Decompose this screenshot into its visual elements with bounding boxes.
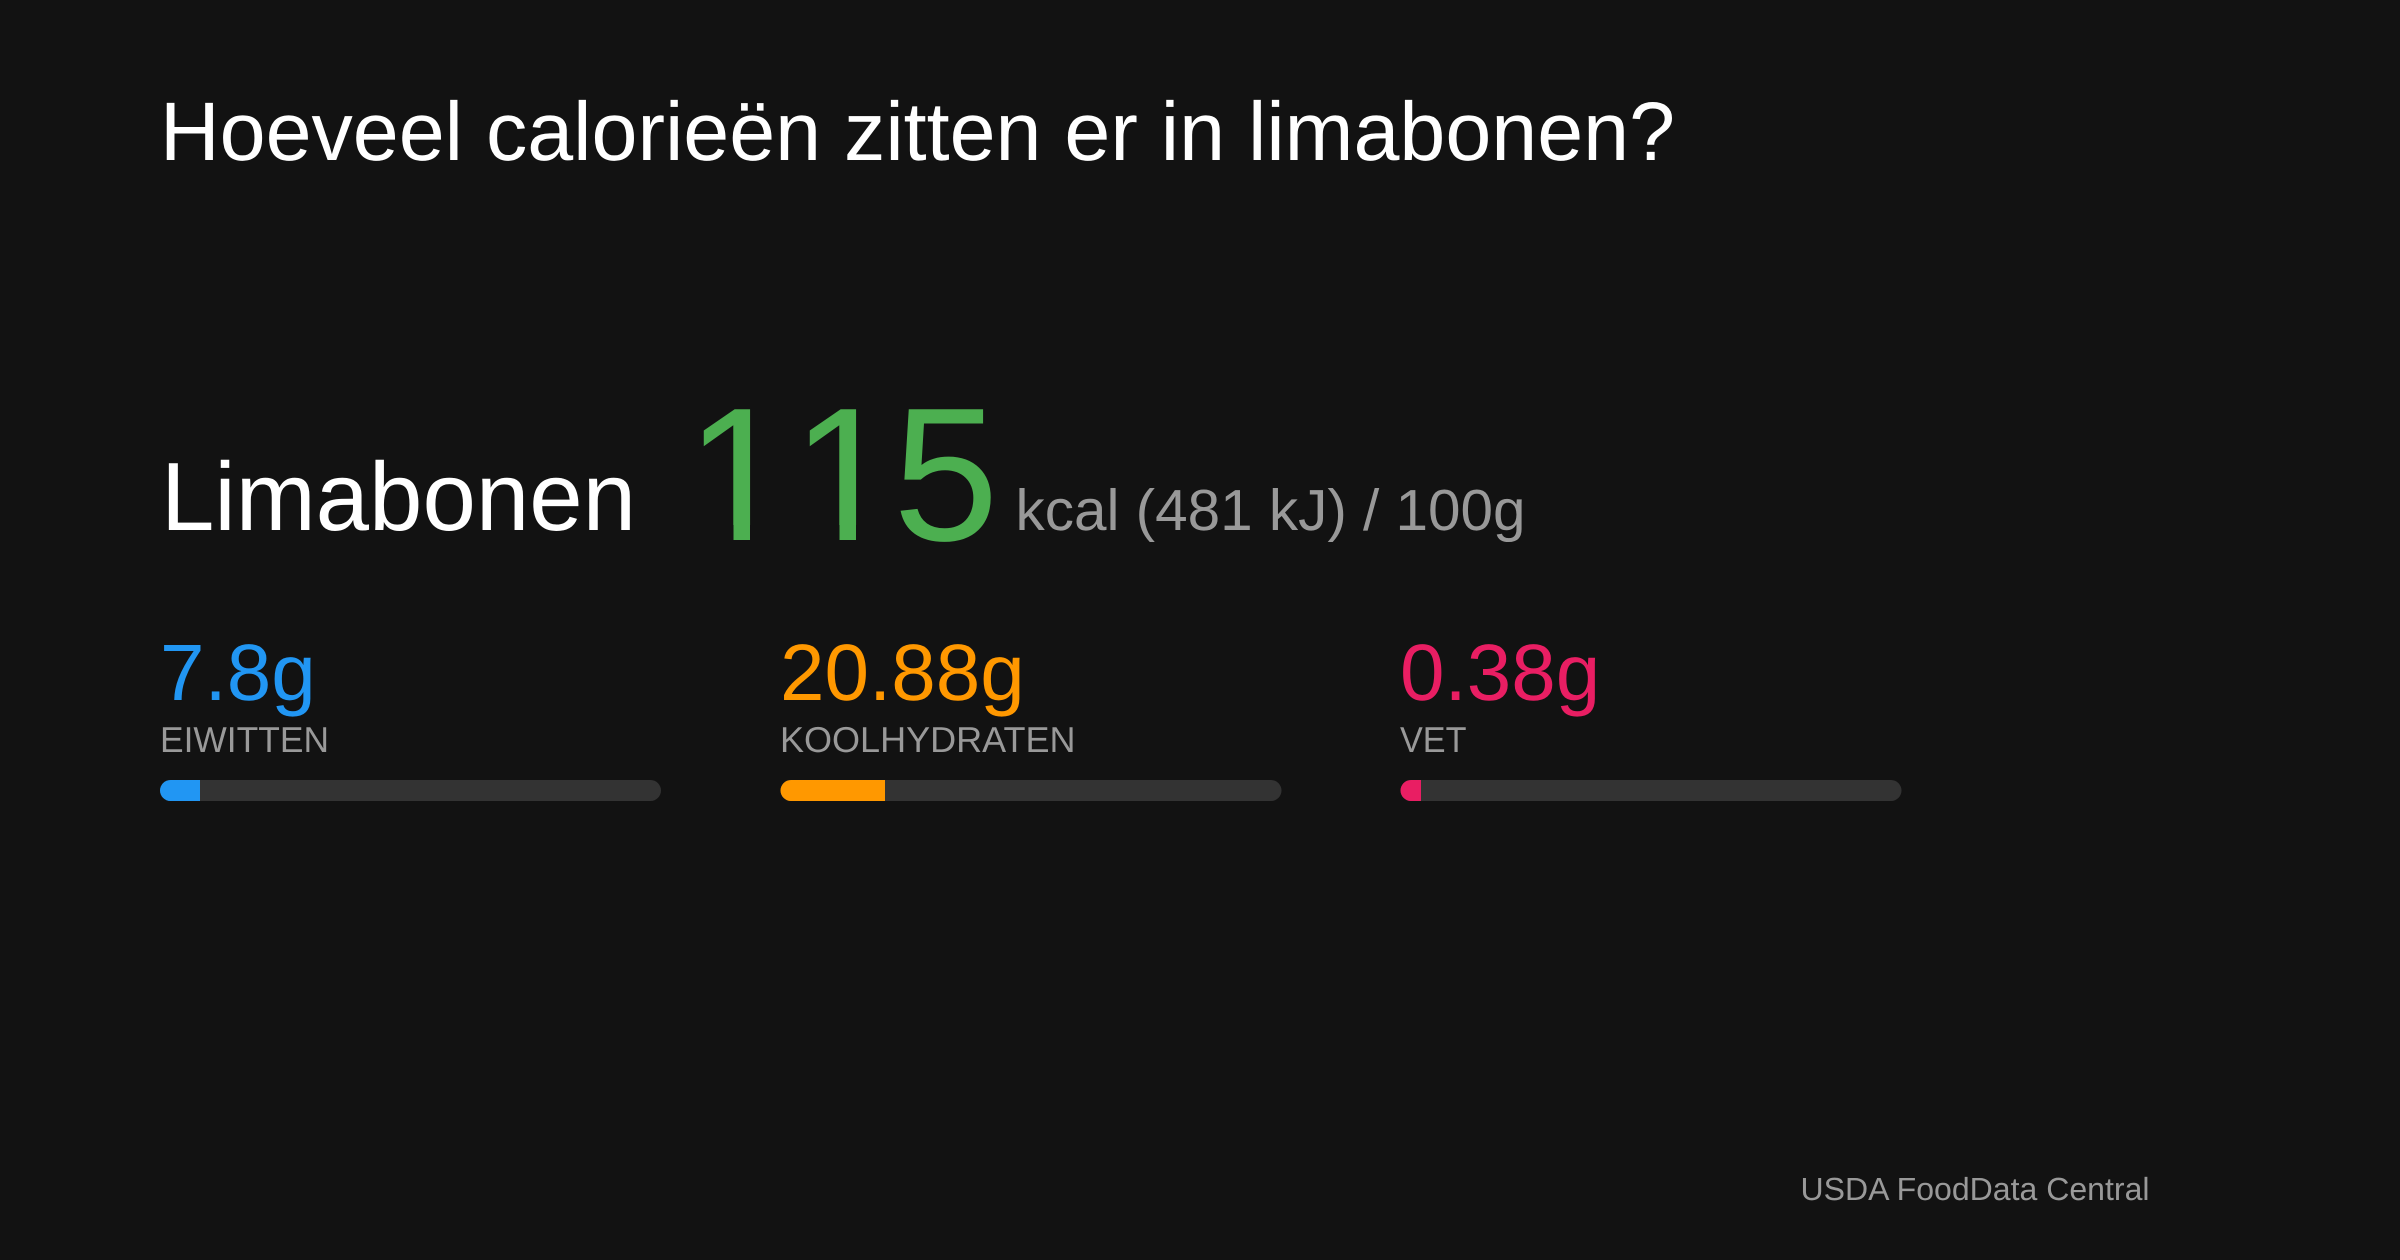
protein value: 7.8g bbox=[160, 628, 316, 717]
fat bar bbox=[1400, 780, 1902, 801]
calorie number: 115 bbox=[686, 369, 999, 581]
fat value: 0.38g bbox=[1400, 628, 1600, 717]
title: Hoeveel calorieën zitten er in limabonen? bbox=[160, 85, 1675, 178]
carbohydrates bar bbox=[780, 780, 1282, 801]
calorie summary row bbox=[168, 409, 1522, 542]
panel: fat bbox=[1400, 628, 1902, 801]
source credit: USDA FoodData Central bbox=[1800, 1171, 2150, 1207]
panel: carbohydrates bbox=[780, 628, 1282, 801]
calorie unit: kcal (481 kJ) / 100g bbox=[1016, 478, 1526, 543]
panel: protein bbox=[160, 628, 661, 801]
protein label: EIWITTEN bbox=[160, 719, 329, 760]
calorie number bbox=[704, 409, 991, 542]
carbohydrates label: KOOLHYDRATEN bbox=[780, 719, 1076, 760]
carbohydrates value: 20.88g bbox=[780, 628, 1025, 717]
fat label: VET bbox=[1400, 719, 1467, 760]
protein bar bbox=[160, 780, 661, 801]
food name: Limabonen bbox=[161, 442, 636, 551]
